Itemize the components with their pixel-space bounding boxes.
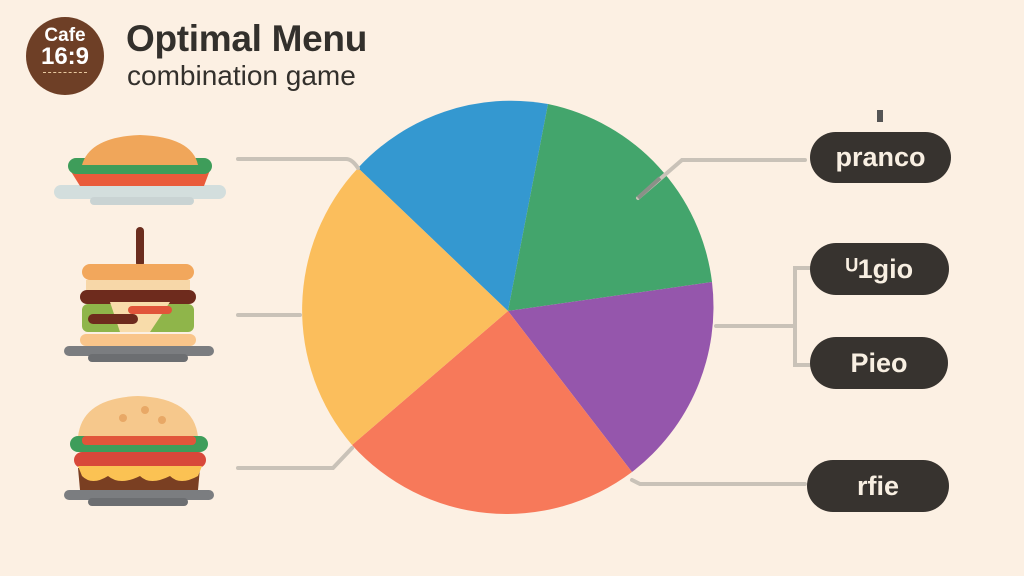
subtitle: combination game: [127, 60, 356, 91]
icon: top sandwich: [54, 135, 226, 205]
label pill: Pieo: Pieo: [850, 348, 908, 378]
label pill: u1gio: ᵁ1gio: [846, 254, 913, 284]
title: Optimal Menu: [126, 18, 367, 59]
label pill: Pieo: [810, 337, 948, 389]
logo badge: Cafe: [44, 25, 86, 46]
label pill: rfie: rfie: [857, 470, 899, 500]
logo badge: [26, 17, 104, 95]
icon: club sandwich: [64, 227, 214, 362]
icon: burger: [64, 396, 214, 506]
logo badge: 16:9: [41, 43, 89, 70]
label pill: u1gio: [810, 243, 949, 295]
label pill: pranco: pranco: [835, 142, 926, 172]
label pill: pranco: [810, 132, 951, 183]
connectors: [238, 159, 810, 484]
pie chart: [302, 101, 713, 514]
label pill: rfie: [807, 460, 949, 512]
